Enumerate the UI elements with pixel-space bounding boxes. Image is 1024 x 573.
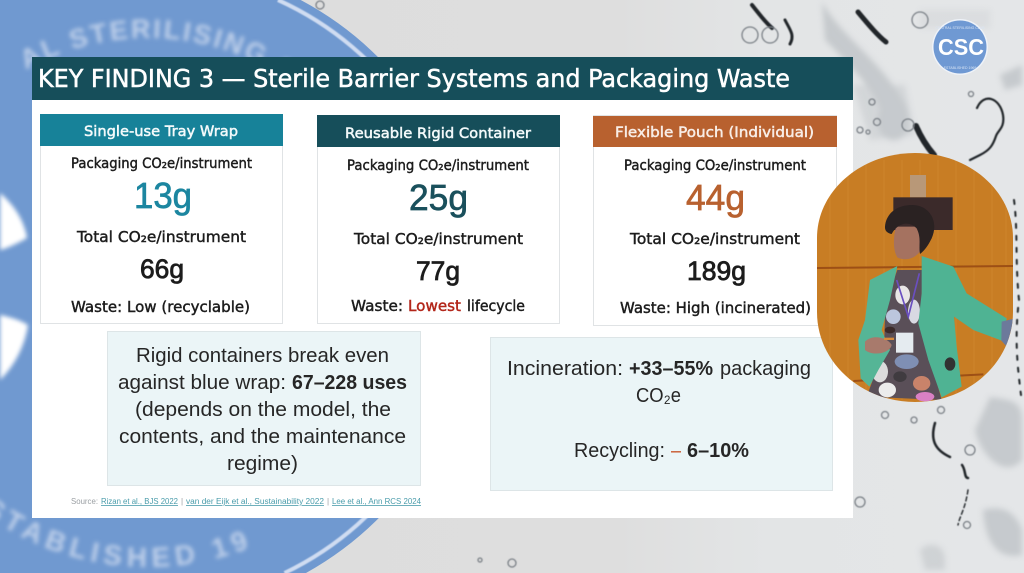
card: flexible pouch: Total CO₂e/instrument [629,230,800,248]
source line: Lee et al., Ann RCS 2024 [332,497,422,506]
card: single-use tray wrap: Total CO₂e/instrument [76,228,246,246]
icon: CSC logo: CSC [938,34,984,60]
card: reusable rigid container: Total CO₂e/instrument [353,230,523,248]
card: reusable rigid container: Reusable Rigid Container [345,126,531,142]
background: blurred blue seal [0,0,379,573]
callout: incineration and recycling: CO₂e [636,385,681,407]
icon: CSC logo: CENTRAL STERILISING CLUB [935,26,985,30]
callout: break-even uses: (depends on the model, the [135,399,391,421]
callout: incineration and recycling: packaging [720,358,811,380]
card: single-use tray wrap: 13g [134,175,192,216]
card: reusable rigid container: lifecycle [467,297,525,315]
card: reusable rigid container: 25g [409,177,468,218]
card: reusable rigid container: Packaging CO₂e/instrument [347,158,529,174]
card: single-use tray wrap: 66g [140,254,184,284]
source line: Rizan et al., BJS 2022 [101,497,179,506]
callout: incineration and recycling: Incineration: [507,358,623,380]
callout: break-even uses [108,332,420,486]
callout: break-even uses: 67–228 uses [292,372,407,394]
icon: CSC logo: ESTABLISHED 1969 [944,66,976,70]
callout: incineration and recycling: +33–55% [629,358,713,380]
card: single-use tray wrap: Packaging CO₂e/instrument [71,156,252,172]
title bar [32,57,853,100]
slide panel [32,57,853,518]
card: flexible pouch: Flexible Pouch (Individual) [615,125,814,141]
callout: incineration and recycling: – [671,440,682,462]
card: flexible pouch [593,116,837,326]
title bar: KEY FINDING 3 — Sterile Barrier Systems and Packaging Waste [38,64,790,93]
head [894,226,920,260]
callout: break-even uses: contents, and the maintenance [119,426,406,448]
source line [71,497,422,506]
source line: van der Eijk et al., Sustainability 2022 [186,497,325,506]
card: flexible pouch: Packaging CO₂e/instrument [624,158,806,174]
jacket [858,266,897,387]
card: single-use tray wrap: Waste: Low (recyclable) [71,298,250,316]
source line: Source: [71,497,98,506]
source line: | [327,497,329,506]
card: single-use tray wrap [40,114,283,324]
card: reusable rigid container: Lowest [408,297,461,315]
icon: CSC logo [932,19,988,75]
source line: | [181,497,183,506]
card: single-use tray wrap: Single-use Tray Wrap [84,124,238,140]
callout: break-even uses: Rigid containers break even [136,345,389,367]
callout: incineration and recycling: 6–10% [687,440,749,462]
card: flexible pouch: 189g [687,256,746,286]
dress [867,270,942,400]
background: blurred blue seal: AL STERILISING C [22,17,289,70]
card: reusable rigid container: 77g [416,256,460,286]
callout: incineration and recycling: Recycling: [574,440,665,462]
presenter photo [817,153,1014,402]
card: reusable rigid container [317,115,560,324]
callout: break-even uses: regime) [227,453,298,475]
callout: break-even uses: against blue wrap: [118,372,286,394]
card: flexible pouch: Waste: High (incinerated) [620,299,811,317]
callout: incineration and recycling [490,338,832,490]
card: flexible pouch: 44g [686,177,745,218]
card: reusable rigid container: Waste: [351,297,403,315]
